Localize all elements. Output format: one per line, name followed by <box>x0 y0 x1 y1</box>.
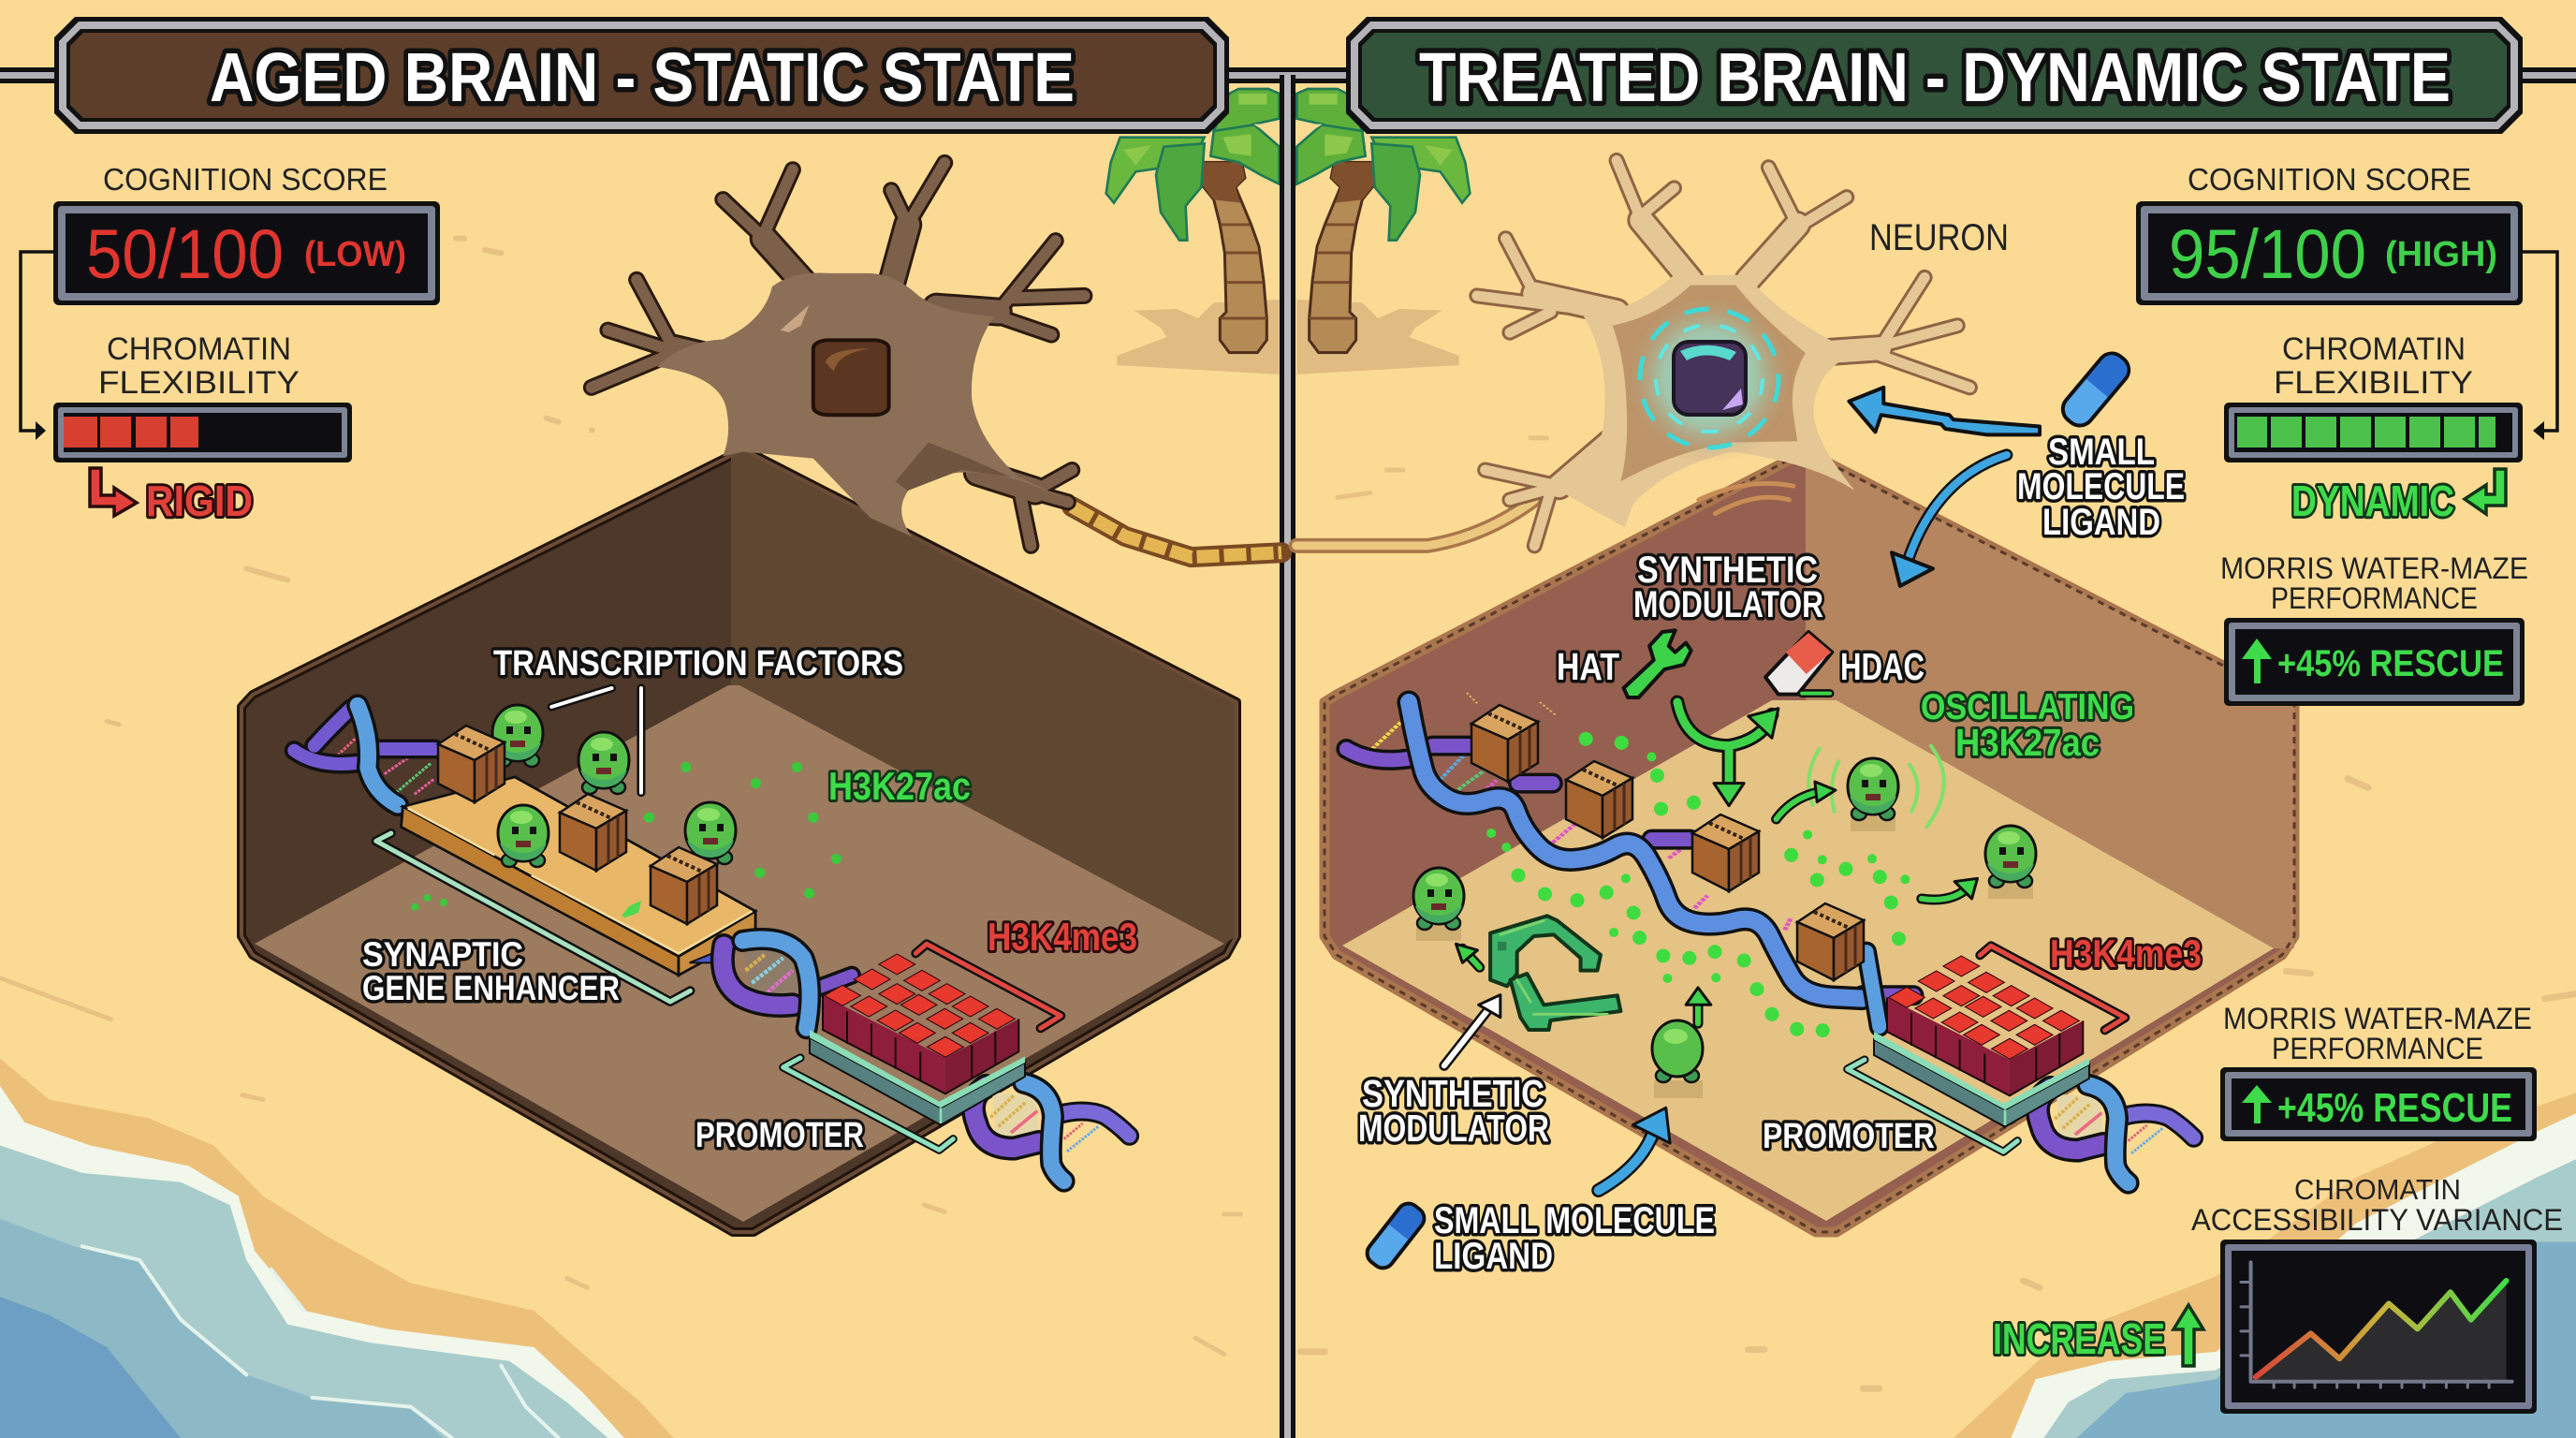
line chart <box>2241 1262 2512 1387</box>
label and arrow: increase: INCREASE <box>1993 1314 2165 1363</box>
label: synthetic modulator lower <box>1358 1072 1549 1150</box>
icon: HDAC eraser <box>1765 632 1832 695</box>
panel: treated chromatin room <box>1325 451 2294 1232</box>
label pointer lines <box>551 688 641 793</box>
label: oscillating H3K27ac: OSCILLATING <box>1921 687 2134 727</box>
header: aged brain <box>54 17 1229 134</box>
bracket: enhancer <box>376 833 690 1002</box>
label: small molecule ligand lower: LIGAND <box>1434 1236 1553 1277</box>
nucleosomes: treated <box>1471 705 1864 980</box>
panel: aged chromatin flexibility: CHROMATIN <box>107 331 291 367</box>
enhancer platform with nucleosomes <box>294 705 755 1002</box>
panel: treated chromatin flexibility <box>2224 331 2523 462</box>
arrow and status: rigid <box>90 468 253 525</box>
DNA ribbon: treated <box>1346 693 1914 1027</box>
arrow: white to claw <box>1444 995 1500 1065</box>
label: H3K27ac aged: H3K27ac <box>828 764 971 808</box>
icon: pill upper <box>2057 347 2134 432</box>
label: oscillating H3K27ac: H3K27ac <box>1955 721 2100 764</box>
panel: chromatin accessibility variance <box>2191 1173 2563 1414</box>
panel: morris maze lower: MORRIS WATER-MAZE <box>2223 1002 2532 1035</box>
score rating: (LOW) <box>304 235 406 274</box>
score value: 50/100 <box>86 215 284 293</box>
label: synthetic modulator lower: MODULATOR <box>1358 1107 1549 1150</box>
promoter block: aged <box>783 944 1130 1181</box>
panel: treated chromatin flexibility: FLEXIBILITY <box>2274 365 2473 401</box>
label: small molecule ligand upper: SMALL <box>2048 432 2155 473</box>
arrow and status: rigid: RIGID <box>146 477 253 525</box>
connector: score to flexibility, treated <box>2523 252 2557 440</box>
label: promoter treated: PROMOTER <box>1763 1117 1935 1156</box>
label: synaptic gene enhancer: SYNAPTIC <box>362 935 523 974</box>
neuron: treated <box>1296 160 1969 546</box>
shoreline: bottom-left ocean <box>0 1058 674 1438</box>
panel: aged chromatin flexibility <box>53 331 352 462</box>
label: synaptic gene enhancer: GENE ENHANCER <box>362 969 620 1007</box>
panel: morris maze upper: PERFORMANCE <box>2271 581 2478 615</box>
shoreline: bottom-right ocean <box>1954 1093 2576 1438</box>
label: synthetic modulator upper <box>1633 550 1823 625</box>
synthetic modulator claw <box>1490 916 1620 1030</box>
title: AGED BRAIN - STATIC STATE <box>210 38 1075 116</box>
label: H3K4me3 treated: H3K4me3 <box>2050 932 2202 976</box>
label: promoter aged: PROMOTER <box>695 1116 864 1155</box>
palm tree: right <box>1296 89 1470 374</box>
neuron: aged <box>592 163 1281 557</box>
panel: treated cognition score: (HIGH) <box>2385 235 2497 274</box>
H3K27ac marks: oscillating <box>1491 739 1905 1031</box>
panel: chromatin accessibility variance: CHROMATIN <box>2294 1173 2461 1206</box>
label: transcription factors: TRANSCRIPTION FACTORS <box>493 644 903 683</box>
small molecule arrow to chromatin <box>1892 455 2007 586</box>
panel: morris maze upper: +45% RESCUE <box>2277 643 2504 684</box>
palm tree: left <box>1106 89 1280 374</box>
panel: morris maze upper <box>2220 551 2528 706</box>
panel: morris maze lower <box>2220 1002 2537 1141</box>
panel: morris maze upper: MORRIS WATER-MAZE <box>2220 551 2528 585</box>
panel: treated chromatin flexibility: CHROMATIN <box>2282 331 2466 367</box>
label: HDAC: HDAC <box>1840 645 1925 688</box>
label: small molecule ligand lower <box>1434 1200 1715 1277</box>
connector: score to flexibility, aged <box>21 252 53 440</box>
label: synaptic gene enhancer <box>362 935 620 1007</box>
H3K27ac marks: aged <box>415 767 836 907</box>
panel: aged chromatin room <box>242 449 1237 1232</box>
panel: morris maze lower: +45% RESCUE <box>2277 1085 2512 1131</box>
panel: chromatin accessibility variance: ACCESSIBILITY VARIANCE <box>2191 1203 2563 1237</box>
label: small molecule ligand lower: SMALL MOLECULE <box>1434 1200 1715 1241</box>
transcription factor blobs and nucleosomes <box>438 705 736 924</box>
panel: treated cognition score: 95/100 <box>2169 215 2366 293</box>
label: COGNITION SCORE <box>103 162 388 197</box>
oscillation waves and motion arrows <box>1456 746 1977 1023</box>
label: synthetic modulator upper: SYNTHETIC <box>1637 550 1818 591</box>
header: treated brain <box>1346 17 2523 134</box>
label: synthetic modulator lower: SYNTHETIC <box>1362 1072 1544 1115</box>
label: oscillating H3K27ac <box>1921 687 2134 764</box>
icon: pill lower <box>1363 1199 1428 1272</box>
nucleus <box>813 340 889 415</box>
sand specks <box>246 239 593 580</box>
title: TREATED BRAIN - DYNAMIC STATE <box>1419 38 2451 116</box>
label: HAT: HAT <box>1557 645 1619 688</box>
mid DNA: aged <box>690 939 852 1028</box>
label: synthetic modulator upper: MODULATOR <box>1633 584 1823 625</box>
label: H3K4me3 aged: H3K4me3 <box>988 915 1137 959</box>
room floor <box>1342 700 2274 1221</box>
label: small molecule ligand upper <box>2017 432 2185 543</box>
label: small molecule ligand upper: LIGAND <box>2042 502 2160 543</box>
transcription factors: treated <box>1413 758 2036 1098</box>
arrow: blue from ligand <box>1599 1108 1670 1191</box>
panel: aged chromatin flexibility: FLEXIBILITY <box>98 365 300 401</box>
small molecule arrow to neuron <box>1849 388 2040 434</box>
room floor <box>255 685 1224 1222</box>
icon: HAT wrench <box>1624 630 1691 697</box>
nucleus: glowing treated <box>1623 292 1795 464</box>
flexibility bar segments <box>64 417 198 448</box>
panel: treated cognition score <box>2136 162 2523 305</box>
upstream DNA <box>294 705 434 805</box>
icon: Y enzyme switch arrow <box>1677 702 1778 806</box>
panel: aged cognition score <box>53 162 440 305</box>
panel: morris maze lower: PERFORMANCE <box>2272 1032 2483 1065</box>
platform <box>402 777 755 957</box>
panel: treated cognition score: COGNITION SCORE <box>2188 162 2471 197</box>
arrow and status: dynamic: DYNAMIC <box>2291 477 2454 525</box>
label: neuron: NEURON <box>1869 217 2009 258</box>
promoter block: treated <box>1848 946 2194 1183</box>
label: small molecule ligand upper: MOLECULE <box>2017 466 2185 507</box>
